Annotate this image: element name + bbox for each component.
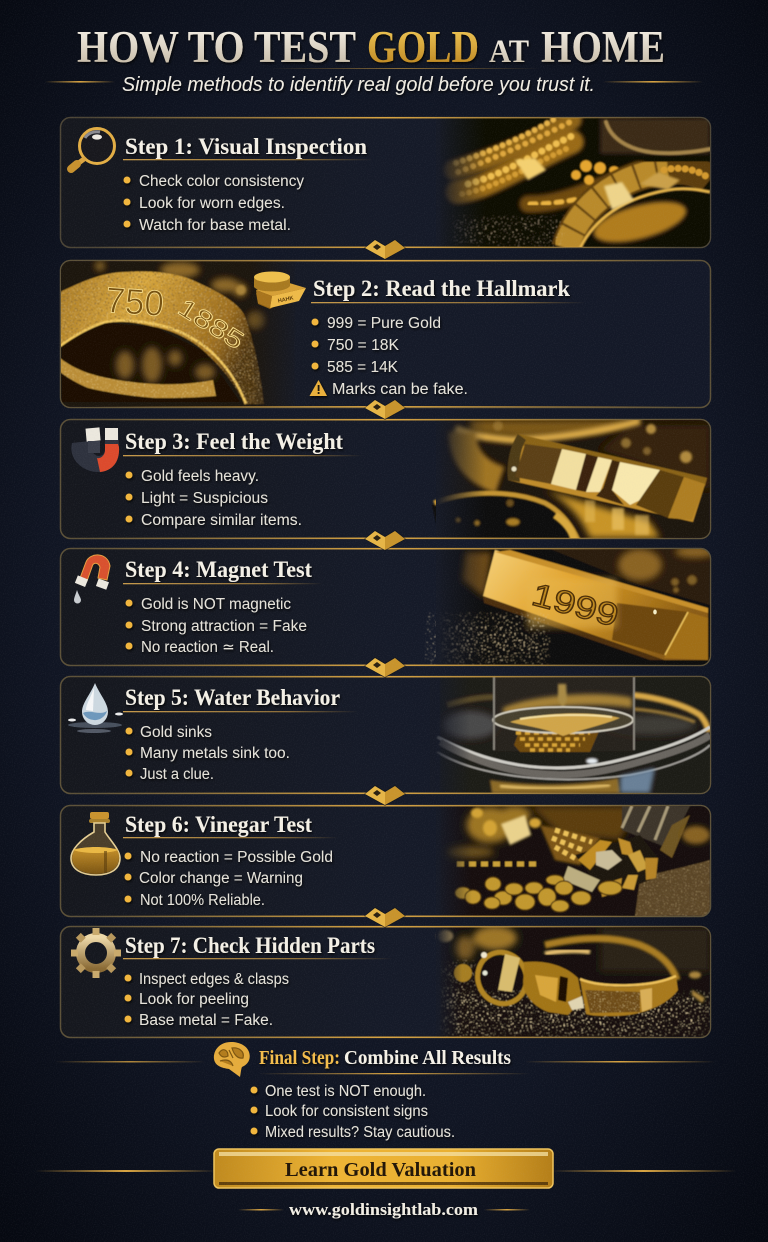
- bullet list: 585 = 14K: [327, 359, 399, 376]
- bullet list: Gold feels heavy.: [141, 468, 259, 485]
- warning note: Marks can be fake.: [332, 381, 468, 398]
- engraved marks: 750: [104, 279, 165, 324]
- step connectors: [364, 239, 406, 928]
- title: GOLD: [367, 22, 479, 72]
- bullet list: Check color consistency: [139, 173, 304, 190]
- footer url: www.goldinsightlab.com: [289, 1200, 478, 1219]
- bullet list: Just a clue.: [140, 766, 214, 783]
- icon: gold bar stack: [254, 272, 306, 309]
- heading: [259, 1047, 511, 1069]
- bullet list: [126, 724, 290, 783]
- bullet list: Compare similar items.: [141, 512, 302, 529]
- bullet list: Look for worn edges.: [139, 195, 285, 212]
- title: HOME: [541, 22, 665, 72]
- bullet list: [126, 596, 307, 656]
- panel: step 6 vinegar test: [60, 806, 710, 916]
- engraved marks: 1885: [173, 293, 249, 355]
- photo: hallmarked ring: [60, 261, 300, 407]
- bullet list: Strong attraction = Fake: [141, 618, 307, 635]
- bullet list: Light = Suspicious: [141, 490, 268, 507]
- photo: gold nuggets and chain: [436, 806, 710, 916]
- heading: Step 4: Magnet Test: [125, 557, 312, 582]
- heading: Step 2: Read the Hallmark: [313, 276, 570, 301]
- bullet list: Inspect edges & clasps: [139, 971, 289, 988]
- panel: step 3 feel the weight: [60, 420, 710, 540]
- bullet list: Look for consistent signs: [265, 1103, 428, 1120]
- section: final step: [55, 1042, 715, 1141]
- panel: step 1 visual inspection: [60, 118, 710, 251]
- photo: ring stamped 1999: [425, 546, 715, 665]
- bullet list: 999 = Pure Gold: [327, 315, 441, 332]
- bullet list: One test is NOT enough.: [265, 1083, 426, 1100]
- title: [77, 22, 665, 72]
- heading: Step 6: Vinegar Test: [125, 812, 312, 837]
- photo: gold chains and ring: [436, 118, 710, 251]
- bullet list: Base metal = Fake.: [139, 1012, 273, 1029]
- heading: Step 1: Visual Inspection: [125, 134, 367, 159]
- photo: gold in glass of water: [430, 677, 710, 793]
- panel: step 2 read the hallmark: [60, 260, 710, 408]
- engraved number: 1999: [528, 576, 623, 634]
- bullet list: No reaction ≃ Real.: [141, 639, 274, 656]
- button: learn gold valuation: [35, 1149, 736, 1188]
- heading: Step 5: Water Behavior: [125, 685, 340, 710]
- bullet list: [126, 468, 302, 529]
- bullet list: 750 = 18K: [327, 337, 400, 354]
- icon: gold bar stack: HAHK: [277, 295, 294, 305]
- bullet list: [124, 849, 333, 909]
- heading: Step 3: Feel the Weight: [125, 429, 343, 454]
- title: HOW TO TEST: [77, 22, 356, 72]
- bullet list: No reaction = Possible Gold: [140, 849, 333, 866]
- bullet list: Look for peeling: [139, 991, 249, 1008]
- bullet list: [312, 315, 441, 376]
- bullet list: Gold is NOT magnetic: [141, 596, 291, 613]
- heading: Final Step:: [259, 1047, 340, 1069]
- bullet list: [250, 1083, 455, 1141]
- icon: magnifying glass: [71, 128, 114, 169]
- title: AT: [489, 34, 529, 70]
- icon: gear: [61, 918, 131, 988]
- bullet list: Watch for base metal.: [139, 217, 291, 234]
- icon: horseshoe magnet: [71, 427, 119, 472]
- button: learn gold valuation: Learn Gold Valuation: [285, 1159, 477, 1181]
- engraved marks: [108, 287, 244, 348]
- panel: step 4 magnet test: [60, 546, 715, 666]
- heading: Step 7: Check Hidden Parts: [125, 933, 375, 958]
- heading: Combine All Results: [344, 1047, 511, 1069]
- bullet list: Gold sinks: [140, 724, 212, 741]
- icon: brain: [214, 1042, 250, 1077]
- bullet list: Not 100% Reliable.: [140, 892, 265, 909]
- bullet list: Mixed results? Stay cautious.: [265, 1124, 455, 1141]
- subtitle: Simple methods to identify real gold before you trust it.: [122, 74, 595, 96]
- bullet list: Color change = Warning: [139, 870, 303, 887]
- bullet list: [124, 173, 304, 234]
- photo: gold rings: [432, 420, 710, 540]
- photo: ring and clasp: [436, 926, 710, 1037]
- panel edge highlights: [90, 117, 680, 1038]
- panel: step 7 check hidden parts: [60, 918, 710, 1038]
- panel: step 5 water behavior: [60, 676, 710, 794]
- icon: vinegar flask: [71, 812, 120, 875]
- bullet list: [124, 971, 289, 1029]
- icon: magnet with drop: [74, 555, 110, 604]
- icon: water drop: [68, 683, 123, 733]
- bullet list: Many metals sink too.: [140, 745, 290, 762]
